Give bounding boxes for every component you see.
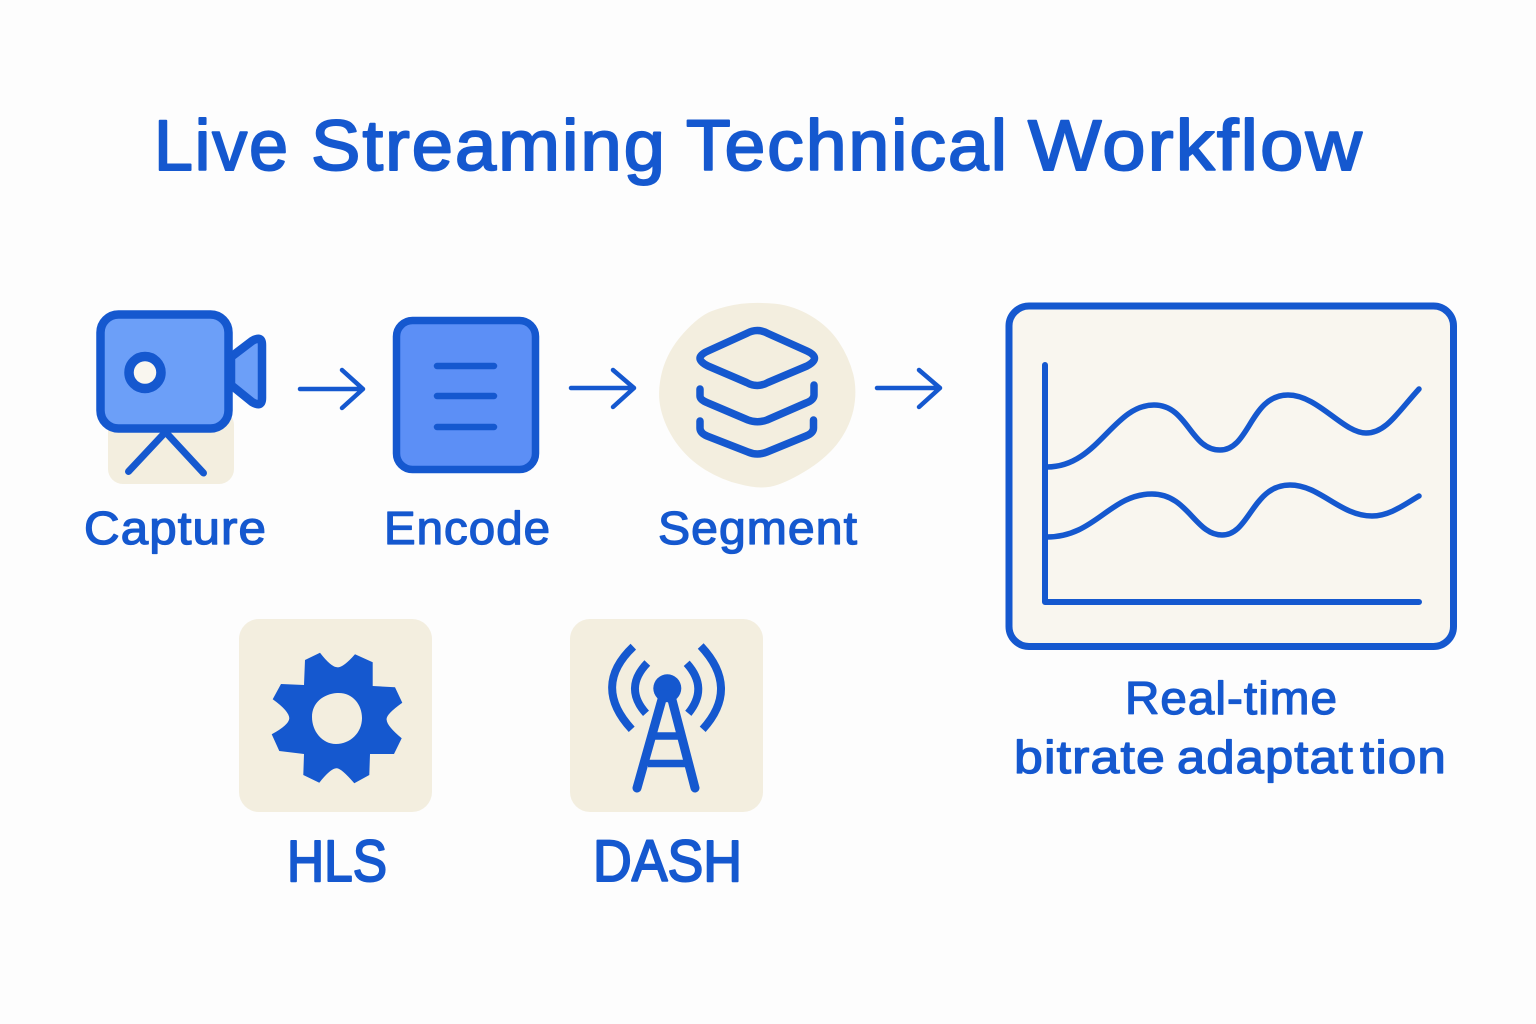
arrow 2	[571, 370, 634, 407]
label: Real-time bitrate adaptation: tion	[1360, 731, 1447, 783]
label: DASH: DASH	[593, 829, 742, 894]
title: Streaming	[311, 107, 667, 186]
icon: encode document	[396, 320, 536, 470]
title: Live	[154, 107, 290, 186]
label: Real-time bitrate adaptation: bitrate	[1014, 731, 1166, 783]
label: Real-time bitrate adaptation: adaptat	[1177, 731, 1354, 783]
icon: segment layers	[659, 303, 855, 487]
title: Workflow	[1028, 107, 1364, 186]
label: Encode: Encode	[384, 502, 551, 554]
title: Technical	[686, 107, 1009, 186]
icon: DASH antenna	[570, 619, 763, 812]
icon: HLS gear	[239, 619, 432, 812]
label: HLS: HLS	[287, 829, 387, 894]
arrow 1	[300, 370, 363, 408]
icon: video camera	[100, 314, 262, 484]
arrow 3	[877, 370, 940, 407]
label: Segment: Segment	[658, 502, 858, 554]
label: Capture: Capture	[84, 502, 267, 554]
label: Real-time bitrate adaptation: Real-time	[1125, 672, 1338, 724]
label: Real-time bitrate adaptation	[1014, 672, 1447, 783]
panel: bitrate chart	[1009, 306, 1454, 646]
